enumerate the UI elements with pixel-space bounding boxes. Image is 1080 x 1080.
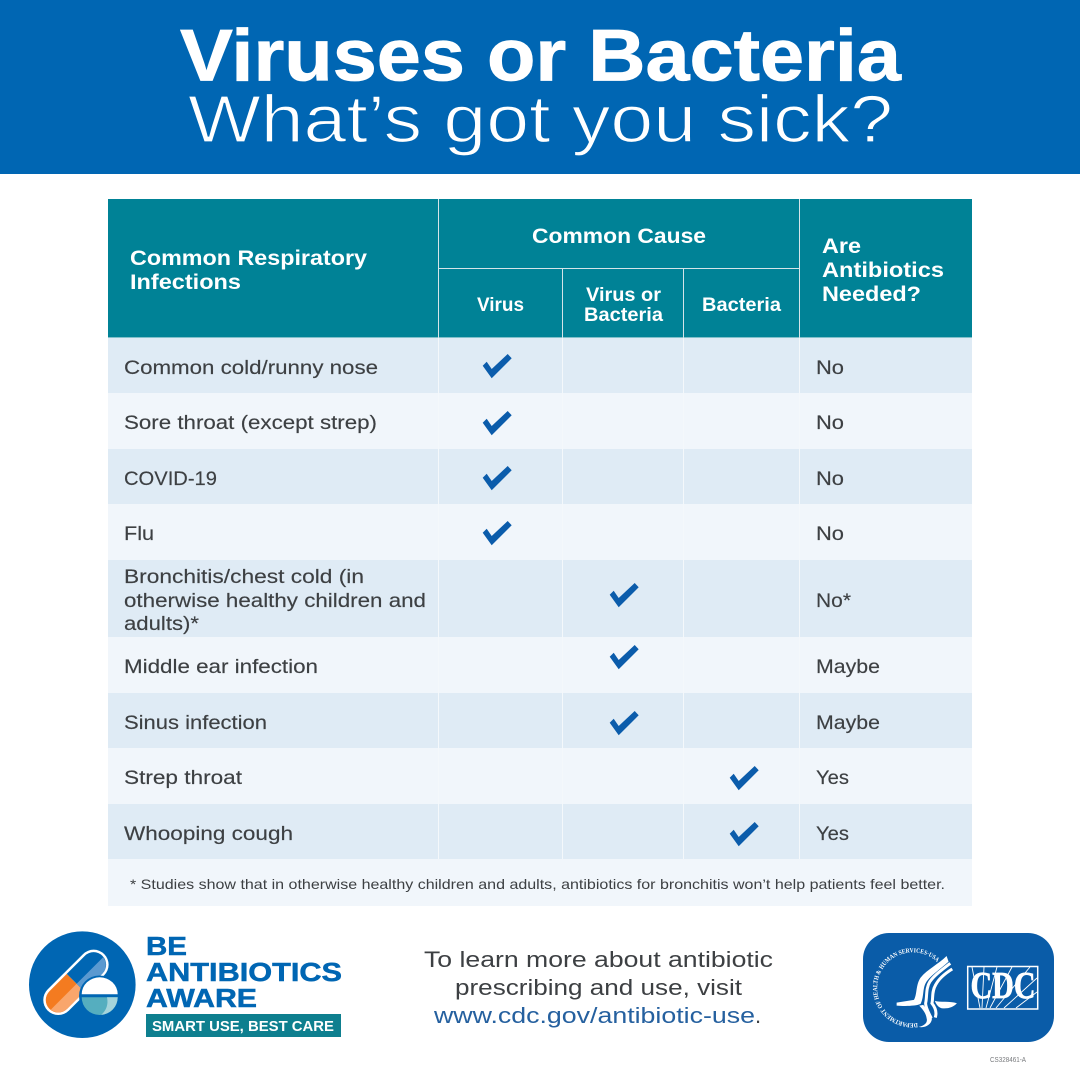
- row: sinus: Maybe: [816, 712, 880, 734]
- row: common cold: Common cold/runny nose: [124, 357, 378, 379]
- column heading: virus or bacteria: Virus or: [586, 285, 662, 306]
- table header: [108, 199, 972, 338]
- call to action text: www.cdc.gov/antibiotic-use: [433, 1003, 755, 1028]
- column heading: antibiotics needed: Needed?: [822, 283, 921, 306]
- row: bronchitis: otherwise healthy children and: [124, 590, 426, 612]
- row: sore throat: Sore throat (except strep): [124, 412, 377, 434]
- row: common cold: No: [816, 357, 844, 379]
- row: sore throat: [124, 411, 844, 435]
- column heading: antibiotics needed: Are: [822, 235, 861, 258]
- logo tagline: SMART USE, BEST CARE: [152, 1018, 334, 1035]
- table: [108, 199, 972, 906]
- row: whooping cough: Yes: [816, 823, 849, 845]
- row: whooping cough: [124, 822, 849, 846]
- document code: CS328461-A: [990, 1057, 1026, 1064]
- call to action text: prescribing and use, visit: [455, 975, 742, 1000]
- call to action text: [424, 947, 773, 1028]
- logo wordmark: BE: [146, 933, 187, 961]
- row: strep throat: [124, 766, 849, 790]
- icon: HHS eagle: [897, 956, 957, 1027]
- row: middle ear: [124, 645, 880, 678]
- title line 1: Viruses or Bacteria: [180, 16, 903, 96]
- logo: be antibiotics aware: [29, 931, 342, 1038]
- row: strep throat: Yes: [816, 767, 849, 789]
- column heading: antibiotics needed: [822, 235, 944, 306]
- row: COVID-19: COVID-19: [124, 468, 217, 490]
- column heading: antibiotics needed: Antibiotics: [822, 259, 944, 282]
- logo tagline: [146, 1014, 341, 1037]
- row: bronchitis: No*: [816, 590, 851, 612]
- call to action text: To learn more about antibiotic: [424, 947, 773, 972]
- row: common cold: [124, 354, 844, 379]
- row: sinus: [124, 711, 880, 735]
- column heading: common cause: Common Cause: [532, 225, 706, 248]
- row: COVID-19: No: [816, 468, 844, 490]
- row: bronchitis: Bronchitis/chest cold (in: [124, 566, 364, 588]
- row: sinus: Sinus infection: [124, 712, 267, 734]
- column heading: infections: Infections: [130, 271, 241, 294]
- HHS seal text: DEPARTMENT OF HEALTH & HUMAN SERVICES·USA: [872, 948, 939, 1028]
- column heading: virus or bacteria: [584, 285, 663, 326]
- column heading: infections: Common Respiratory: [130, 247, 367, 270]
- row: COVID-19: [124, 466, 844, 490]
- table row backgrounds: [108, 338, 972, 906]
- row: whooping cough: Whooping cough: [124, 823, 293, 845]
- row: bronchitis: adults)*: [124, 613, 199, 635]
- column heading: virus or bacteria: Bacteria: [584, 305, 663, 326]
- logo wordmark: [146, 933, 342, 1013]
- logo: HHS and CDC: [863, 933, 1054, 1042]
- call to action text: .: [755, 1003, 761, 1028]
- column heading: virus: Virus: [477, 295, 524, 316]
- title banner: [0, 0, 1080, 174]
- row: flu: No: [816, 523, 844, 545]
- row: flu: [124, 521, 844, 545]
- title line 2: What’s got you sick?: [188, 82, 893, 157]
- CDC logo: CDC: [970, 965, 1036, 1007]
- icon: capsule and pill: [29, 931, 136, 1038]
- row: middle ear: Maybe: [816, 656, 880, 678]
- row: bronchitis: [124, 566, 851, 635]
- row: flu: Flu: [124, 523, 154, 545]
- column heading: bacteria: Bacteria: [702, 295, 781, 316]
- row: middle ear: Middle ear infection: [124, 656, 318, 678]
- row: sore throat: No: [816, 412, 844, 434]
- logo wordmark: ANTIBIOTICS: [146, 959, 342, 987]
- footnote: * Studies show that in otherwise healthy children and adults, antibiotics for bronchitis won’t help patients feel better.: [130, 876, 945, 892]
- row: strep throat: Strep throat: [124, 767, 243, 789]
- logo wordmark: AWARE: [146, 985, 257, 1013]
- column heading: infections: [130, 247, 367, 294]
